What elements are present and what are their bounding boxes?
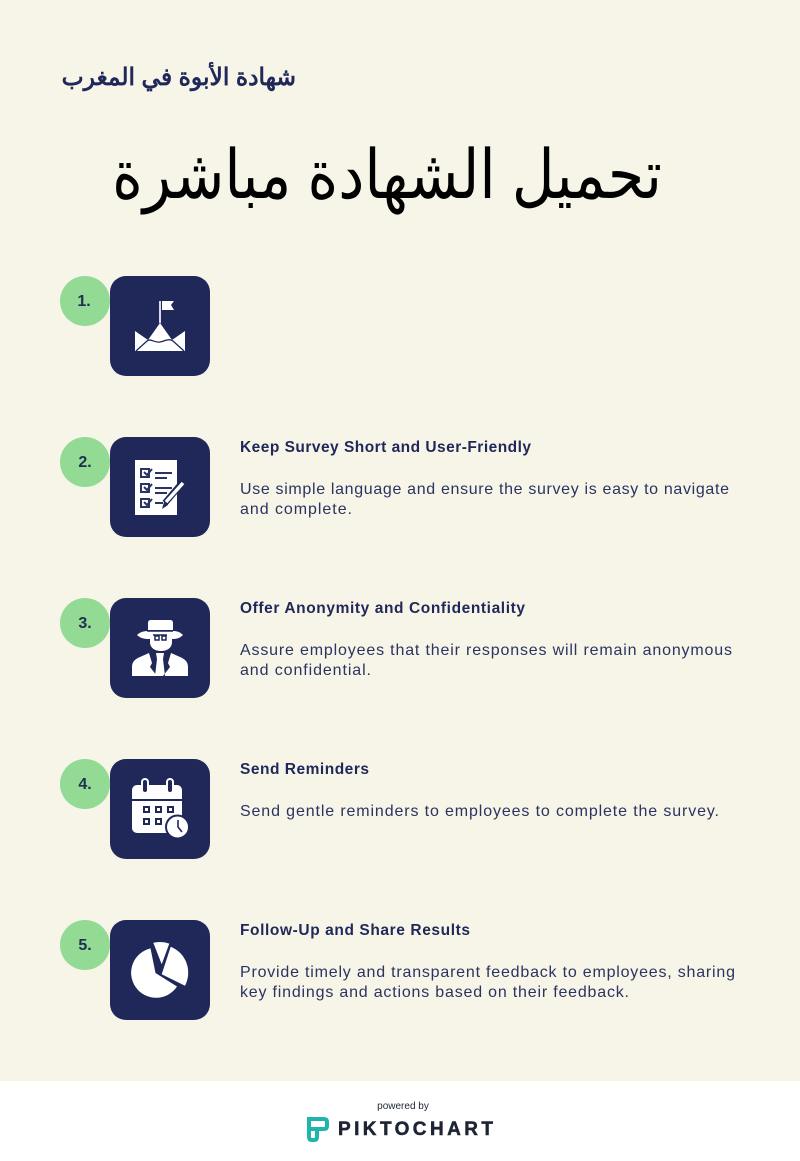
number badge 4: 4. [78, 776, 92, 793]
powered by: powered by [377, 1101, 429, 1112]
text block 5 [240, 922, 735, 1001]
icon: pie chart [110, 920, 210, 1020]
icon: calendar with clock [110, 759, 210, 859]
icon: envelope mountain flag [110, 276, 210, 376]
step 4 [60, 759, 210, 859]
step 2 [60, 437, 210, 537]
step 1 [60, 276, 210, 376]
number badge 4 [60, 759, 110, 809]
icon: piktochart logo [309, 1119, 327, 1140]
number badge 5: 5. [78, 937, 92, 954]
icon: anonymous spy [110, 598, 210, 698]
footer [0, 1081, 800, 1161]
number badge 2: 2. [78, 454, 92, 471]
subtitle: شهادة الأبوة في المغرب [62, 60, 296, 92]
text block 2: Keep Survey Short and User-Friendly [240, 439, 531, 456]
number badge 1: 1. [77, 293, 91, 310]
step 5 [60, 920, 210, 1020]
text block 2 [240, 439, 729, 518]
text block 5: Follow-Up and Share Results [240, 922, 470, 939]
number badge 2 [60, 437, 110, 487]
wordmark: PIKTOCHART [338, 1119, 493, 1140]
text block 3: Assure employees that their responses will remain anonymous [240, 642, 732, 659]
title: تحميل الشهادة مباشرة [112, 138, 662, 215]
text block 3: and confidential. [240, 662, 371, 679]
text block 4: Send gentle reminders to employees to complete the survey. [240, 803, 719, 820]
number badge 1 [60, 276, 110, 326]
text block 4: Send Reminders [240, 761, 369, 778]
text block 5: key findings and actions based on their feedback. [240, 984, 629, 1001]
step 3 [60, 598, 210, 698]
text block 3 [240, 600, 732, 679]
text block 2: and complete. [240, 501, 352, 518]
text block 2: Use simple language and ensure the survey is easy to navigate [240, 481, 729, 498]
icon: checklist with pen [110, 437, 210, 537]
text block 5: Provide timely and transparent feedback to employees, sharing [240, 964, 735, 981]
text block 3: Offer Anonymity and Confidentiality [240, 600, 525, 617]
number badge 3 [60, 598, 110, 648]
number badge 3: 3. [78, 615, 92, 632]
number badge 5 [60, 920, 110, 970]
text block 4 [240, 761, 719, 820]
